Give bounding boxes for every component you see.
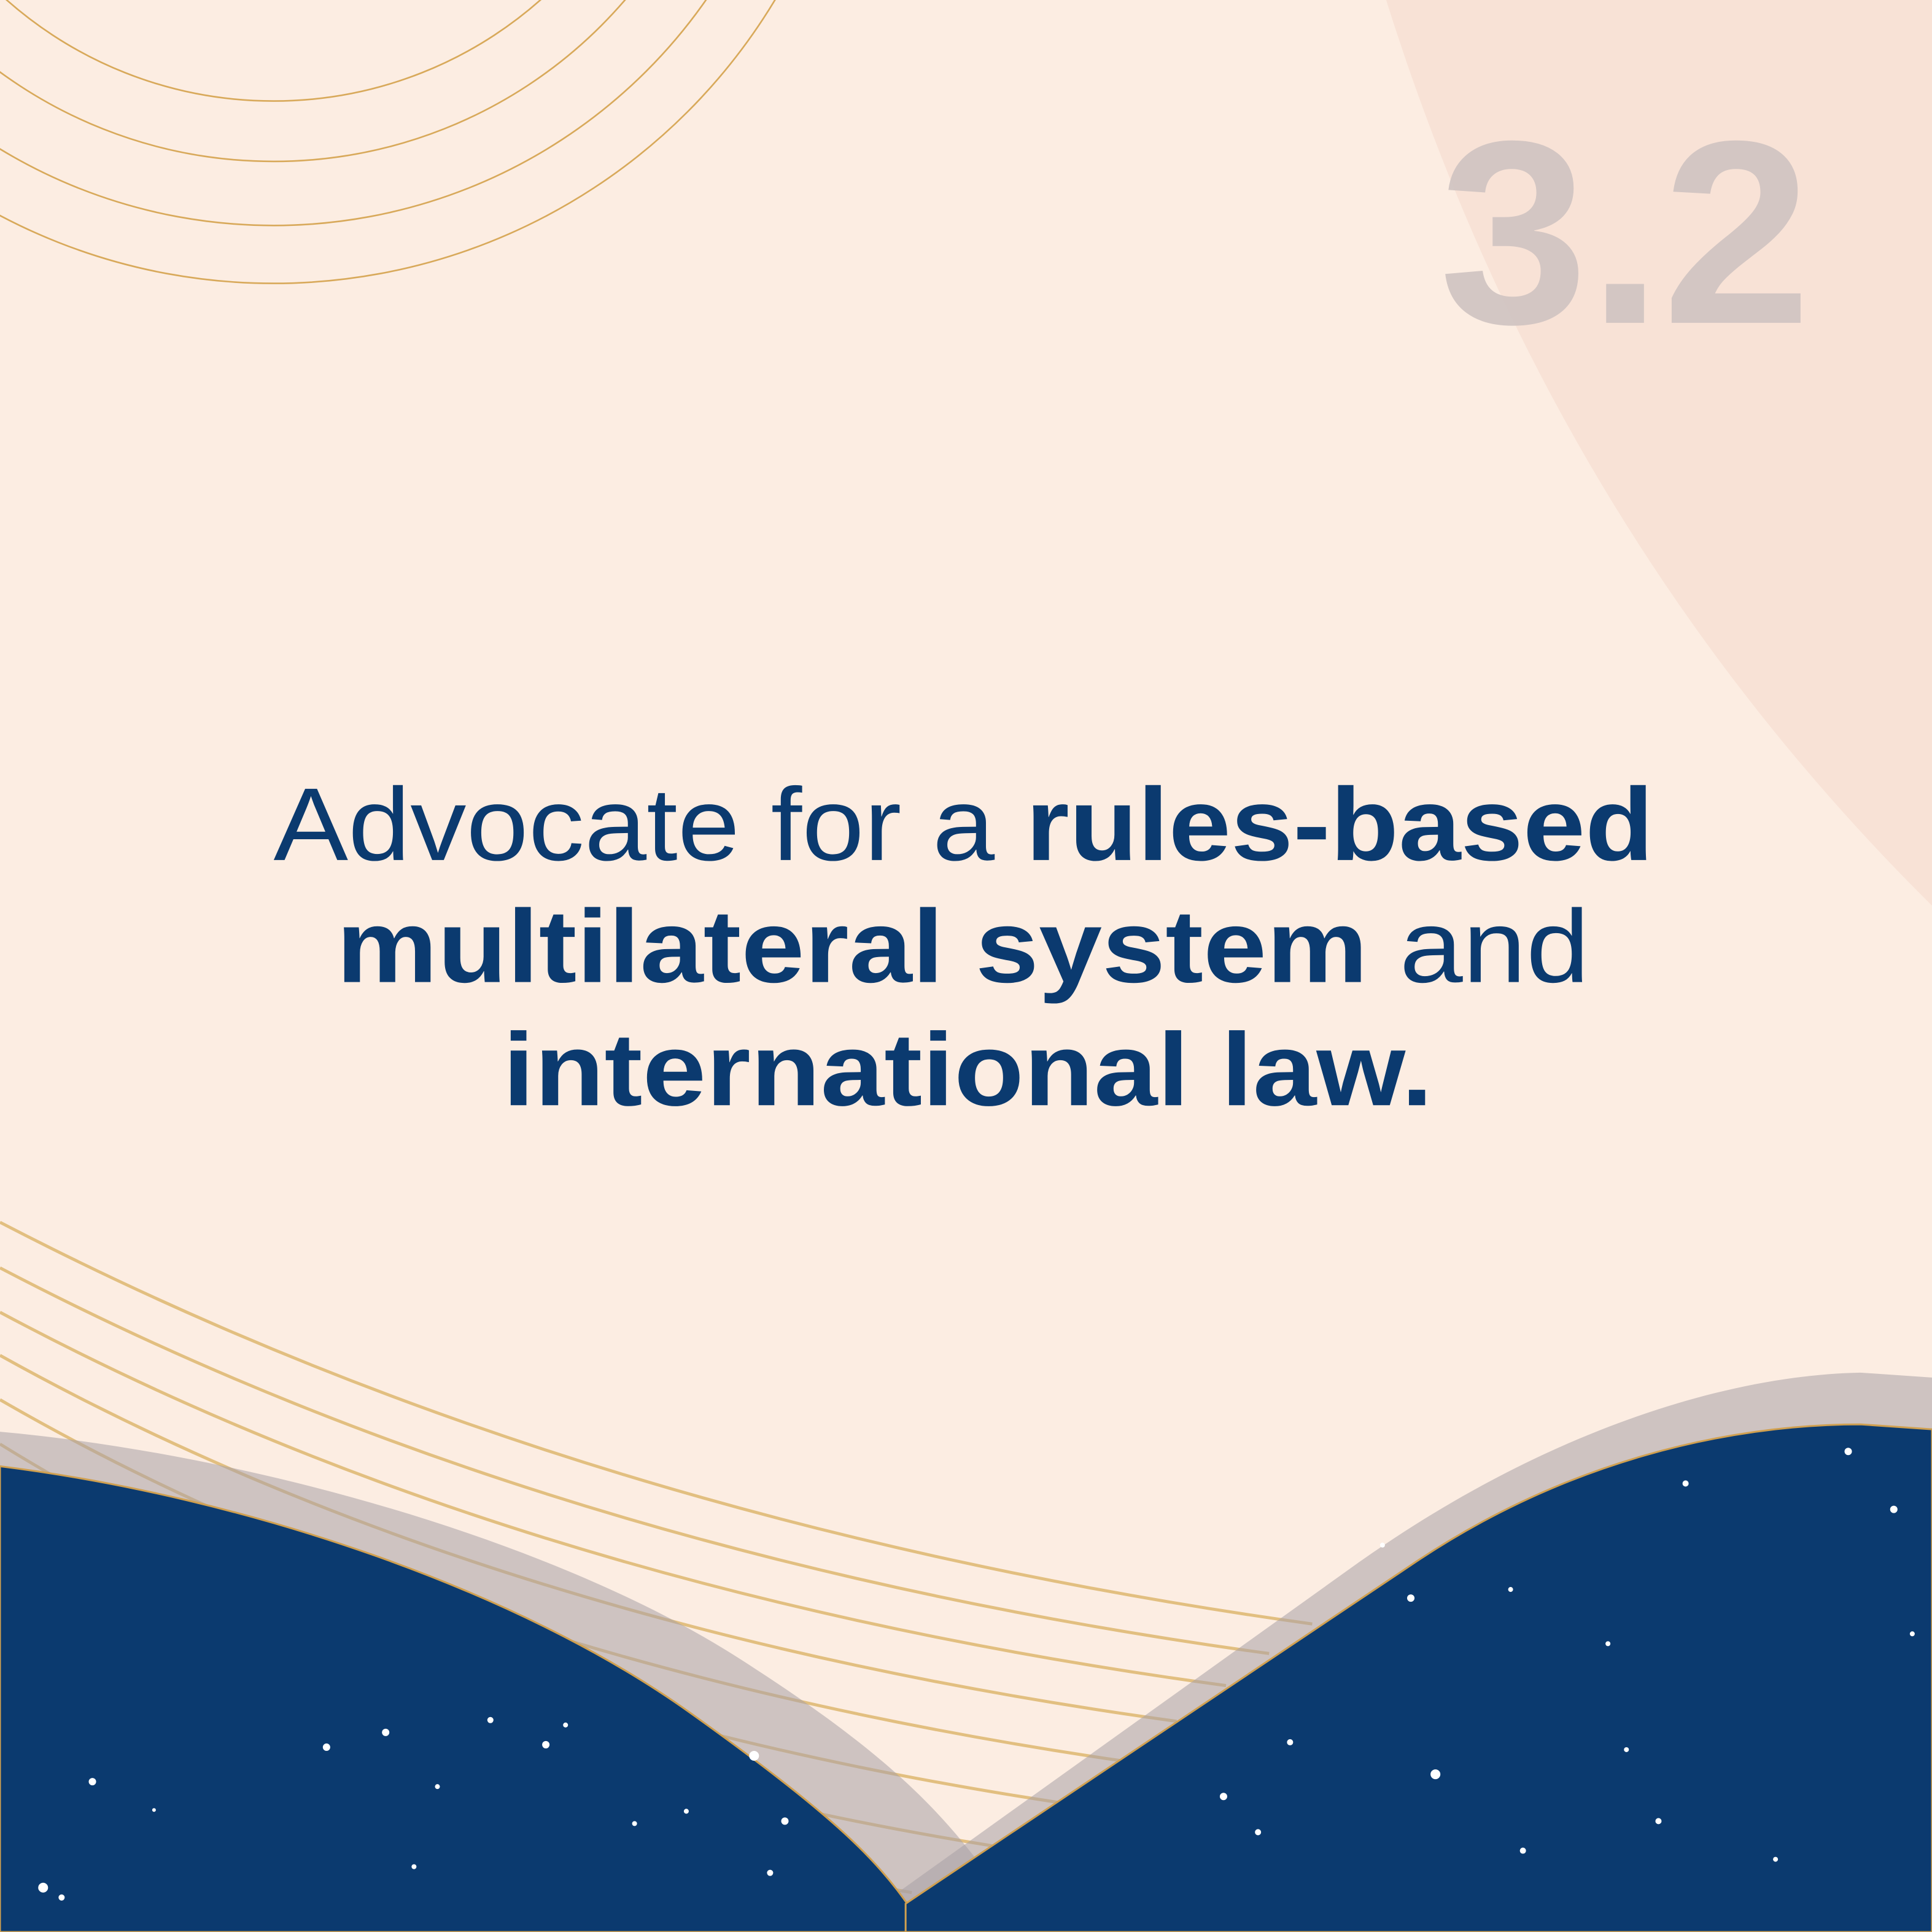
main statement xyxy=(274,766,1653,1127)
gray band right xyxy=(899,1373,1932,1932)
navy hill right xyxy=(906,1424,1932,1932)
speckles xyxy=(38,1448,1915,1901)
navy hill left xyxy=(0,1466,926,1932)
gray band left xyxy=(0,1432,1029,1932)
main statement: multilateral system and xyxy=(336,888,1589,1004)
decorative arcs top-left xyxy=(0,0,859,284)
main statement: international law. xyxy=(503,1011,1433,1127)
main statement: Advocate for a rules-based xyxy=(274,766,1653,882)
background shape: right pink region xyxy=(1386,0,1932,906)
section number: 3.2 xyxy=(1439,87,1811,379)
gold lines bottom xyxy=(0,1222,1312,1893)
